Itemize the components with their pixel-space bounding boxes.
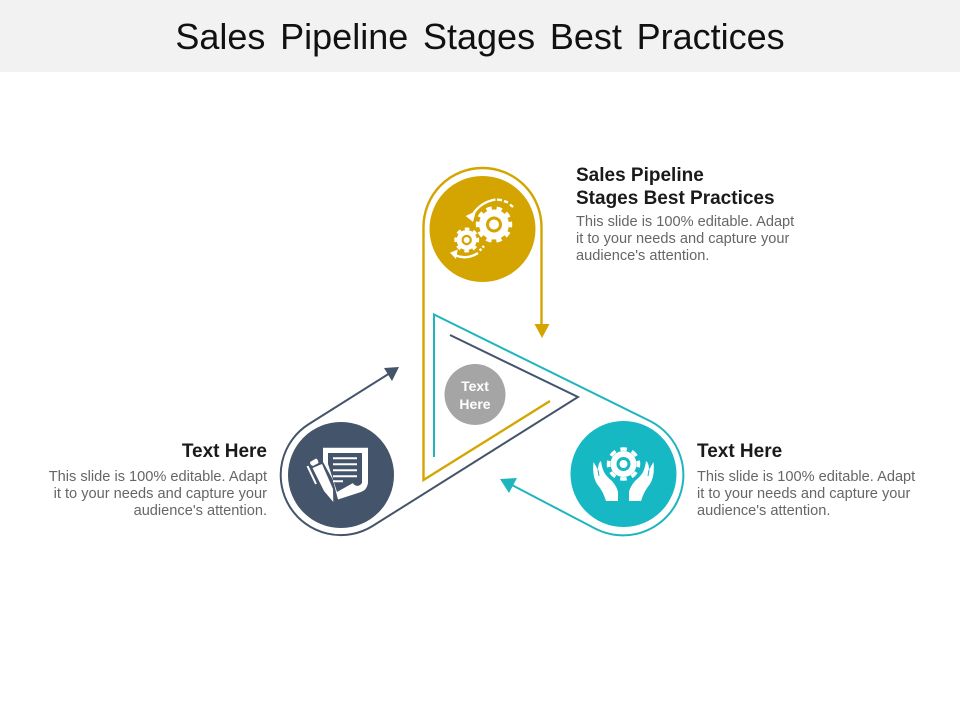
heading: sales pipeline: Stages Best Practices xyxy=(576,188,775,209)
teal looped arrow xyxy=(434,314,683,535)
body text: audience's attention. xyxy=(697,503,830,519)
icon: document and pen xyxy=(308,448,368,502)
text block: top right xyxy=(576,165,794,264)
body text: it to your needs and capture your xyxy=(54,486,267,502)
text block: left xyxy=(49,441,267,519)
header band with title xyxy=(0,0,960,72)
body text: This slide is 100% editable. Adapt xyxy=(576,214,794,230)
body text: it to your needs and capture your xyxy=(697,486,910,502)
body text xyxy=(49,469,267,519)
body text: it to your needs and capture your xyxy=(576,231,789,247)
body text xyxy=(576,214,794,264)
body text: This slide is 100% editable. Adapt xyxy=(697,469,915,485)
center grey circle label: Text xyxy=(461,378,489,394)
body text: This slide is 100% editable. Adapt xyxy=(49,469,267,485)
heading: right text here: Text Here xyxy=(697,441,782,462)
text block: right xyxy=(697,441,916,519)
heading: sales pipeline: Sales Pipeline xyxy=(576,165,704,186)
heading: left text here: Text Here xyxy=(182,441,267,462)
body text: audience's attention. xyxy=(134,503,267,519)
center grey circle label: Here xyxy=(459,396,491,412)
teal circle with hands and gear icon xyxy=(570,421,676,527)
body text xyxy=(697,469,916,519)
gold circle with gears icon xyxy=(430,176,536,282)
heading: sales pipeline xyxy=(576,165,775,209)
title: Sales Pipeline Stages Best Practices xyxy=(175,16,785,57)
icon: hands holding gear xyxy=(593,446,654,501)
dark circle with document icon xyxy=(288,422,394,528)
center grey circle label xyxy=(444,364,506,425)
icon: gears xyxy=(450,200,513,259)
body text: audience's attention. xyxy=(576,248,709,264)
dark looped arrow xyxy=(281,335,578,535)
gold looped arrow xyxy=(424,168,550,480)
